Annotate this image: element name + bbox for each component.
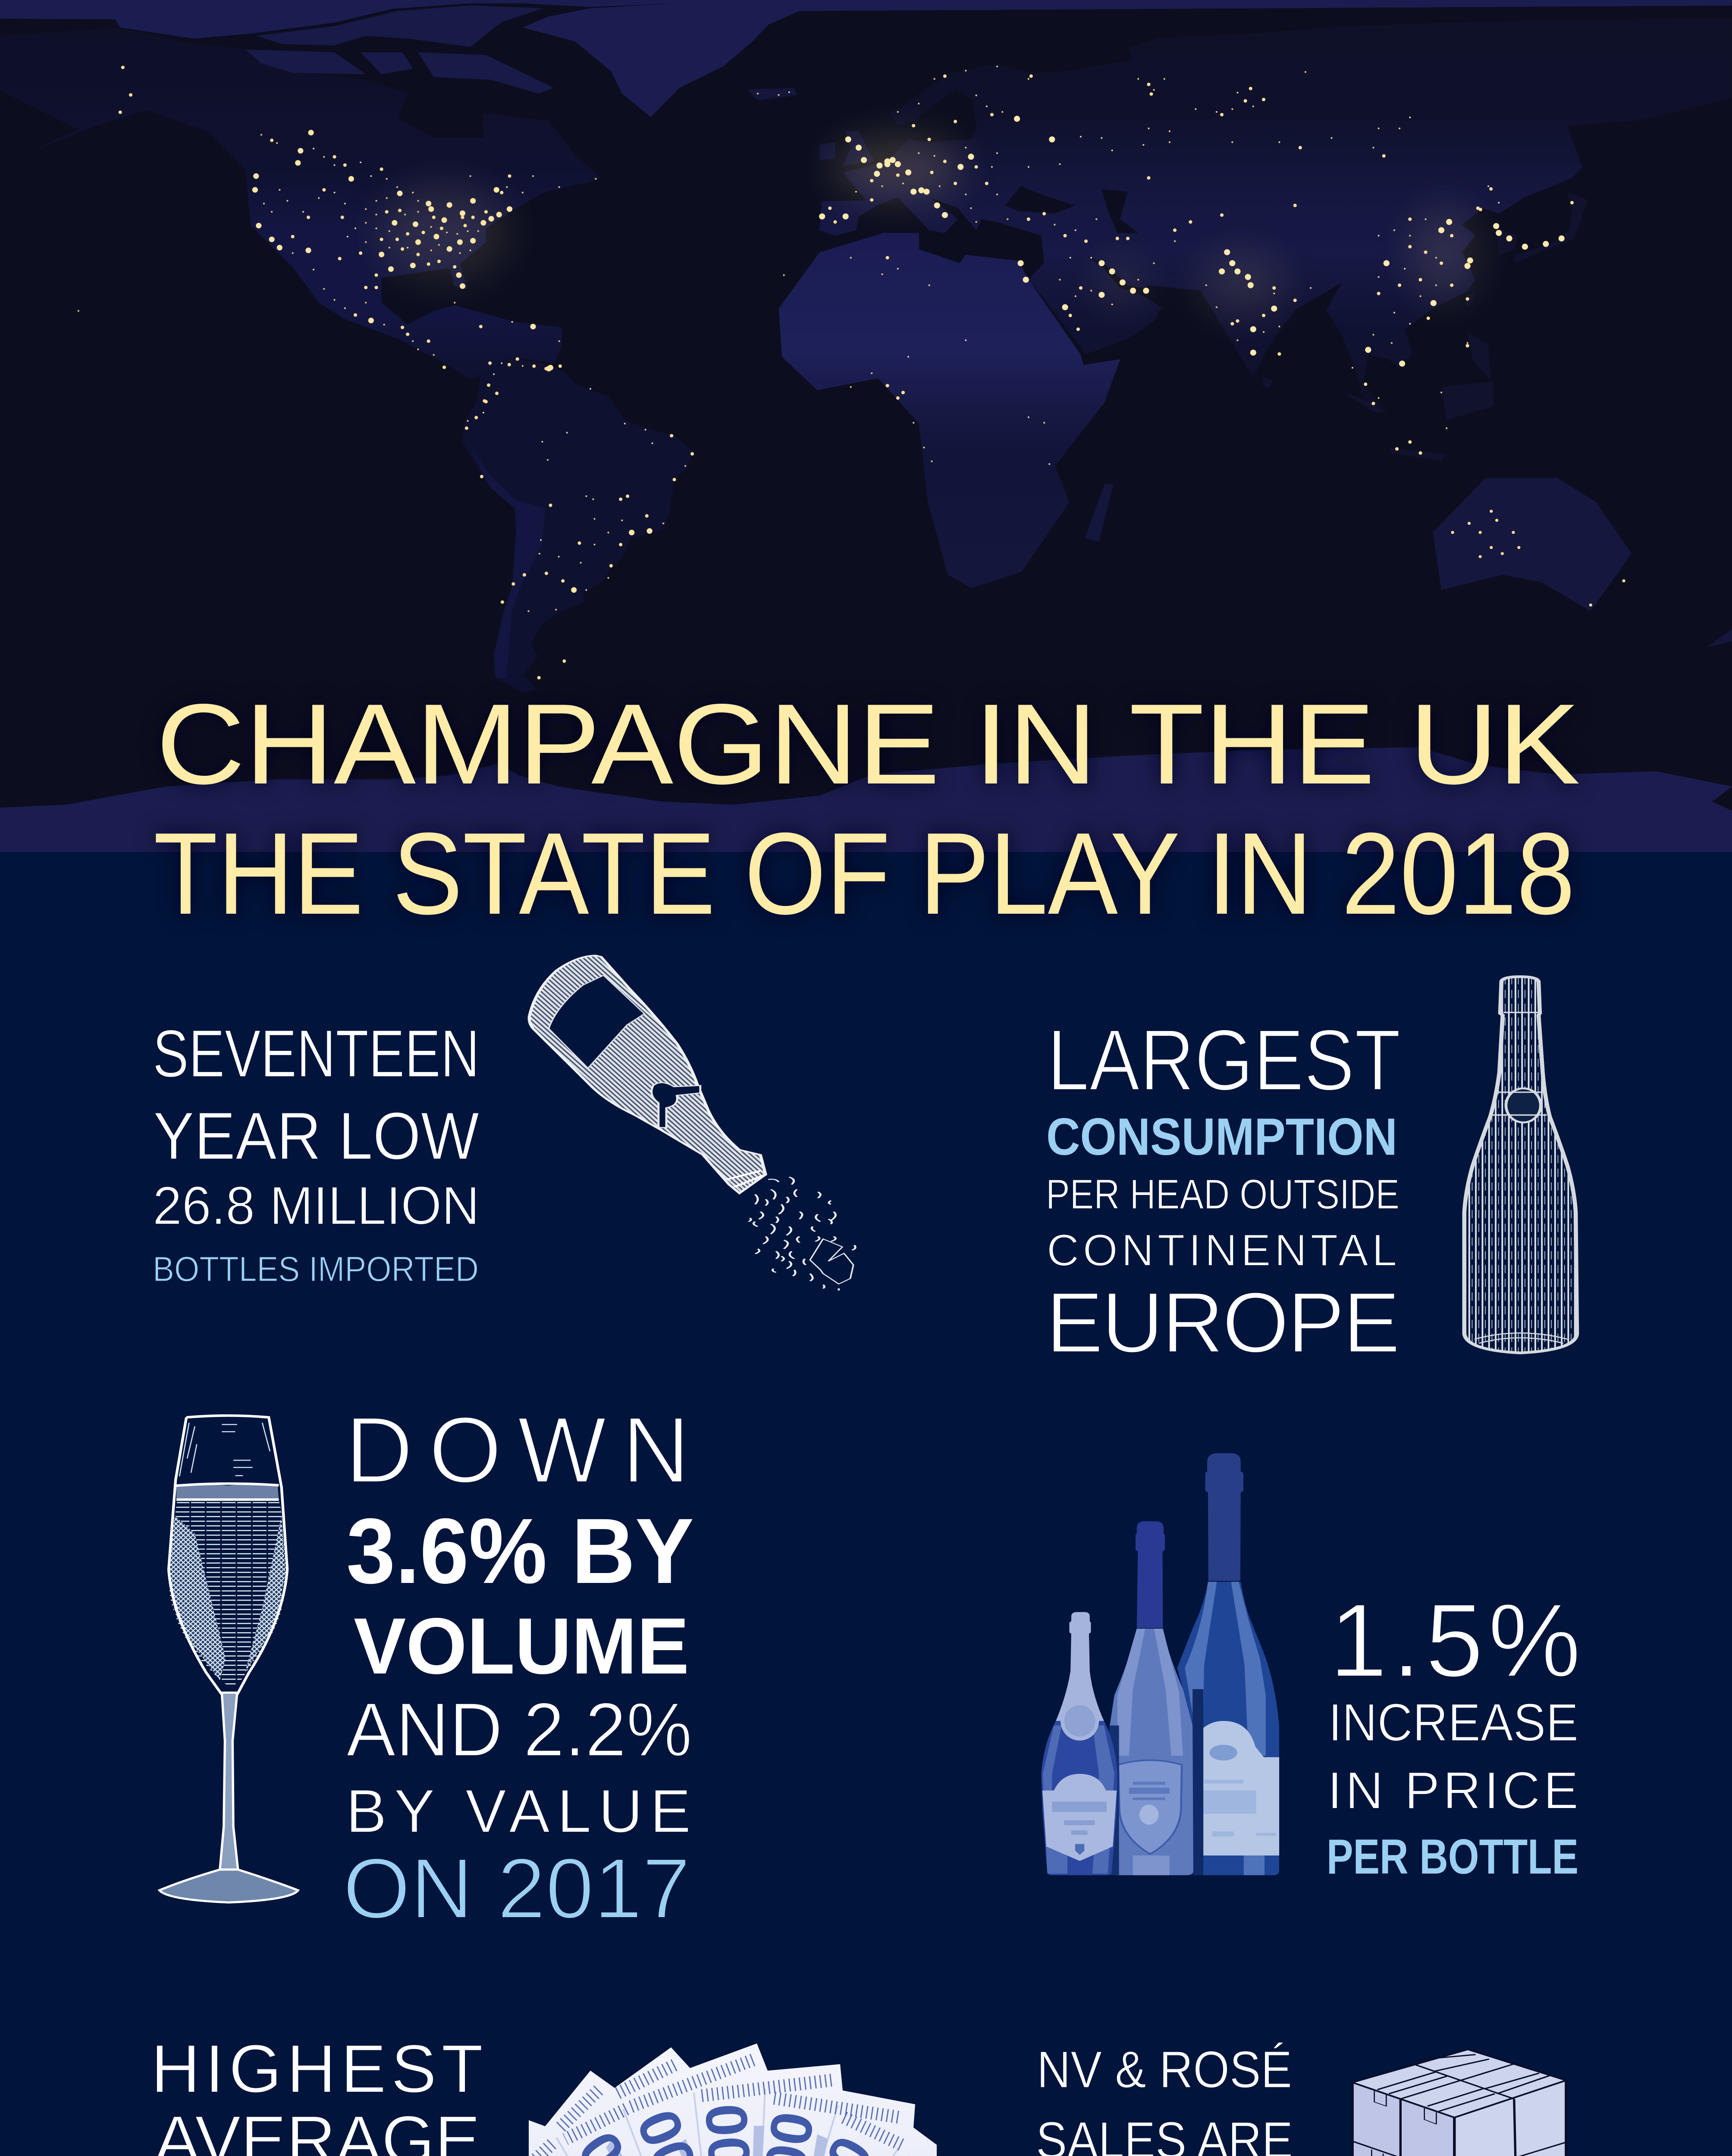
halo: India <box>1199 254 1285 315</box>
title line 2: THE STATE OF PLAY IN 2018 <box>154 809 1575 939</box>
land: Greenland <box>523 3 800 117</box>
map ocean <box>0 0 1732 852</box>
collar bands <box>1492 1012 1547 1115</box>
small towns <box>78 92 789 421</box>
Andes and altiplano <box>471 448 545 678</box>
land: Japan, Korea and Taiwan <box>1465 192 1588 307</box>
icon: fan of 500 euro notes <box>529 2043 937 2156</box>
middle bottle body <box>1110 1629 1193 1875</box>
icon: three bottles of increasing size <box>1041 1453 1279 1875</box>
liquid <box>169 1500 287 1688</box>
bottle label window <box>549 975 644 1068</box>
500 numerals <box>483 2100 933 2156</box>
line: year low: YEAR LOW <box>153 1099 479 1174</box>
small bottle collar centre <box>1064 1705 1095 1736</box>
note paper <box>529 2043 937 2156</box>
arctic ice band <box>0 0 1732 38</box>
spray of foam <box>748 1177 855 1291</box>
line: continental: CONTINENTAL <box>1047 1225 1397 1275</box>
panel: down by volume text <box>343 1398 694 1937</box>
medium cities <box>467 363 692 678</box>
halo: Persian Gulf <box>1095 263 1147 306</box>
bright cities <box>822 119 1562 364</box>
bottle glass <box>1464 977 1577 1353</box>
carton seams and tape <box>1352 2055 1566 2156</box>
middle bottle neck and cap <box>1136 1521 1165 1628</box>
note edges <box>529 2089 898 2156</box>
line: highest: HIGHEST <box>151 2031 483 2107</box>
neck medallion <box>1506 1088 1541 1122</box>
icon: engraved champagne bottle <box>1464 977 1577 1353</box>
base rings <box>1475 1333 1567 1343</box>
middle bottle shield label <box>1118 1760 1182 1854</box>
bowl outline <box>169 1416 287 1695</box>
icon: pallet of cartons <box>1335 2049 1580 2156</box>
panel: NV and rosé text <box>1036 2040 1296 2156</box>
panel: seventeen year low text <box>153 1016 480 1289</box>
bright cities <box>550 368 650 590</box>
Eurasia <box>819 19 1732 461</box>
line: volume: VOLUME <box>354 1602 689 1691</box>
line: 3.6% by: 3.6% BY <box>346 1499 694 1603</box>
southern continents and Antarctica <box>0 233 1732 852</box>
small label crest <box>1075 1844 1084 1855</box>
land: Canadian Arctic islands <box>245 6 554 94</box>
city lights: Australia <box>1453 511 1624 605</box>
bright cities <box>255 133 549 369</box>
middle shield details <box>1129 1782 1170 1800</box>
small label details <box>1052 1802 1107 1835</box>
middle shield medallion <box>1139 1805 1159 1825</box>
South America <box>462 357 692 693</box>
city lights: South America <box>467 363 692 678</box>
large bottle label <box>1195 1721 1279 1855</box>
halo: eastern United States <box>380 185 509 280</box>
line: seventeen: SEVENTEEN <box>153 1016 480 1091</box>
land: Sri Lanka, Indonesia and Philippines <box>1263 332 1494 461</box>
panel: largest consumption text <box>1046 1011 1401 1371</box>
foot <box>160 1870 298 1902</box>
small bottle body <box>1041 1721 1117 1875</box>
land: Africa <box>779 233 1120 588</box>
medium cities <box>830 76 1572 453</box>
line: nv & rosé: NV & ROSÉ <box>1037 2040 1292 2099</box>
title <box>154 680 1580 939</box>
land: South America outline <box>462 357 692 693</box>
land: Madagascar and New Zealand <box>1085 484 1732 647</box>
middle bottle shadow <box>1192 1689 1203 1875</box>
halo: western Europe <box>832 138 962 198</box>
land: British Isles <box>819 131 874 166</box>
small towns <box>528 389 685 611</box>
line: by value: BY VALUE <box>346 1777 691 1846</box>
foil seal <box>652 1083 700 1128</box>
carton left face <box>1352 2082 1454 2156</box>
line: and 2.2%: AND 2.2% <box>346 1687 692 1772</box>
large bottle neck and cap <box>1205 1453 1243 1581</box>
line: largest: LARGEST <box>1047 1011 1401 1109</box>
city glow: soft halos <box>380 138 1479 315</box>
cork <box>810 1239 853 1284</box>
line: europe: EUROPE <box>1046 1275 1400 1371</box>
Black Sea and Caspian Sea <box>1005 186 1138 233</box>
line: increase: INCREASE <box>1328 1693 1578 1752</box>
carton right face <box>1454 2081 1566 2156</box>
line: consumption: CONSUMPTION <box>1046 1107 1397 1166</box>
large bottle label details <box>1195 1780 1276 1836</box>
North America and the Arctic <box>0 0 1732 379</box>
liquid crosshatch <box>169 1516 286 1680</box>
land: Iceland <box>747 88 797 100</box>
large bottle highlights <box>1185 1582 1266 1875</box>
halo: eastern China <box>1410 207 1479 302</box>
icon: bottle popping its cork <box>529 956 855 1291</box>
small towns <box>851 66 1499 464</box>
land: Australia <box>1433 478 1632 611</box>
title line 1: CHAMPAGNE IN THE UK <box>156 680 1580 808</box>
line: per head outside: PER HEAD OUTSIDE <box>1046 1171 1399 1218</box>
hatched security strips <box>532 2060 935 2156</box>
line: on 2017: ON 2017 <box>343 1841 690 1937</box>
windows at the note centres <box>554 2126 875 2156</box>
foam band <box>176 1484 279 1500</box>
city lights: Eurasia and Africa <box>822 66 1572 464</box>
small bottle label <box>1042 1774 1117 1861</box>
panel: highest average text <box>151 2031 483 2156</box>
land: North American mainland <box>0 28 601 379</box>
Australian towns <box>1453 511 1624 605</box>
medium cities <box>120 67 546 401</box>
carton top face <box>1352 2049 1566 2118</box>
small bottle neck and cap <box>1056 1612 1104 1721</box>
bottle collar <box>726 1171 766 1187</box>
bottle body <box>529 956 766 1193</box>
icon: champagne flute <box>160 1416 298 1902</box>
city lights: North America <box>78 67 789 421</box>
rim shading <box>179 1423 270 1476</box>
world map at night <box>0 0 1732 852</box>
carton flaps <box>1371 2090 1436 2156</box>
panel: price increase text <box>1327 1582 1581 1884</box>
line: per bottle: PER BOTTLE <box>1327 1830 1578 1884</box>
small bottle shadow <box>1109 1726 1119 1875</box>
small bottle collar medallion <box>1061 1701 1099 1741</box>
line: 1.5%: 1.5% <box>1329 1582 1581 1699</box>
stem <box>220 1692 238 1870</box>
line: 26.8 million: 26.8 MILLION <box>153 1176 480 1236</box>
large bottle body <box>1177 1582 1279 1875</box>
line: bottles imported: BOTTLES IMPORTED <box>153 1250 479 1289</box>
large bottle label eye <box>1209 1745 1237 1761</box>
Hudson Bay <box>397 99 483 138</box>
upper empty bowl <box>179 1416 278 1485</box>
small bottle highlights <box>1043 1726 1114 1874</box>
middle bottle highlights <box>1117 1629 1183 1875</box>
line: in price: IN PRICE <box>1327 1761 1578 1820</box>
line: down: DOWN <box>345 1398 690 1503</box>
land: Antarctica <box>0 747 1732 852</box>
land: Eurasia outline <box>819 19 1732 412</box>
